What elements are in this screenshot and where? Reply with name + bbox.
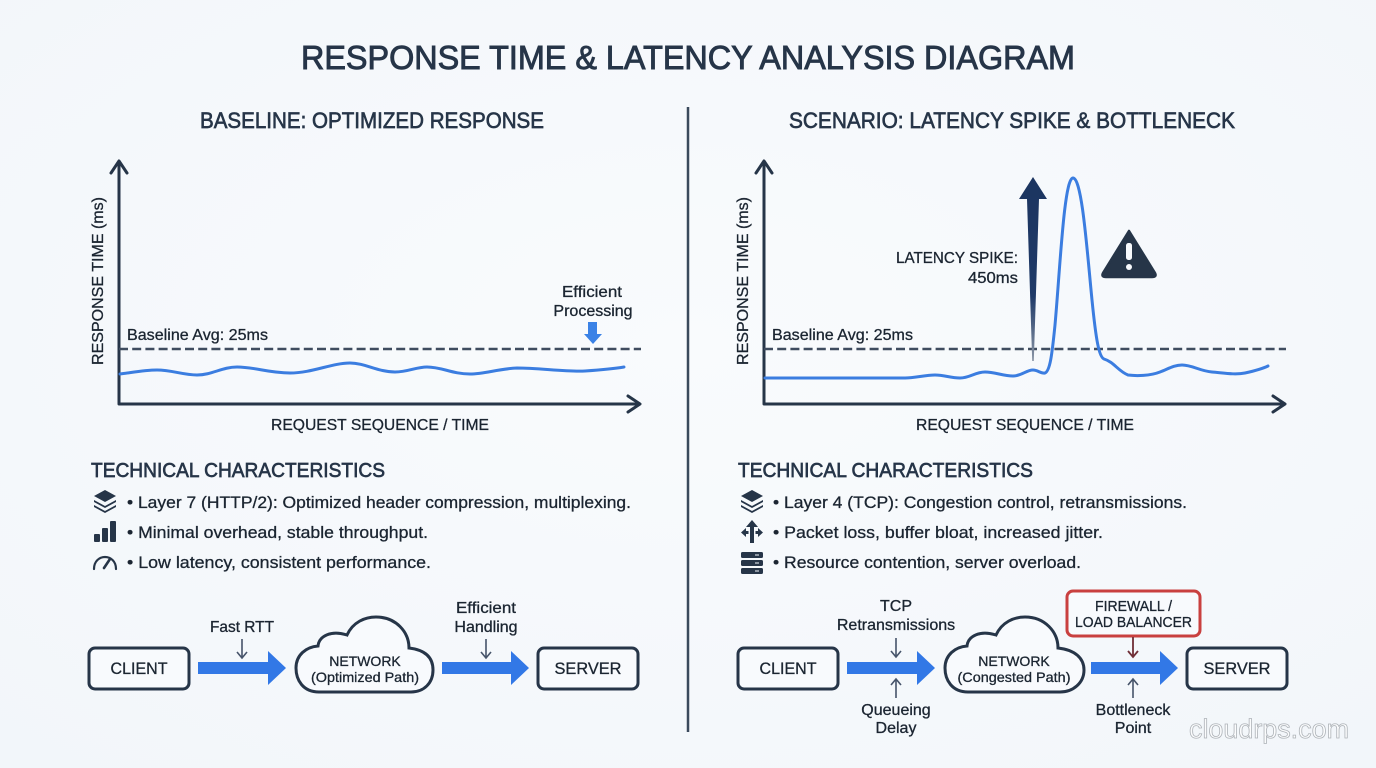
bullet: layer 4: • Layer 4 (TCP): Congestion control, retransmissions. xyxy=(773,493,1187,512)
flow diagram: scenario xyxy=(738,591,1287,737)
small arrow: tcp retransmissions xyxy=(891,638,901,657)
response curve with spike xyxy=(765,178,1268,378)
bullet: layer 7: • Layer 7 (HTTP/2): Optimized header compression, multiplexing. xyxy=(127,493,631,512)
network cloud: NETWORK xyxy=(978,653,1050,669)
efficient processing label: Efficient xyxy=(562,284,623,301)
network cloud: (Congested Path) xyxy=(958,669,1070,685)
heading: baseline: BASELINE: OPTIMIZED RESPONSE xyxy=(200,108,544,133)
latency spike label: 450ms xyxy=(968,270,1018,287)
network cloud: (Optimized Path) xyxy=(311,669,419,685)
arrow: network to server xyxy=(442,651,529,685)
watermark: cloudrps.com xyxy=(1189,714,1349,744)
subheading: TECHNICAL CHARACTERISTICS xyxy=(91,460,385,482)
icon: server stack xyxy=(741,552,763,574)
efficient handling label: Efficient xyxy=(456,600,517,617)
title: RESPONSE TIME & LATENCY ANALYSIS DIAGRAM xyxy=(301,39,1075,76)
bullet: resource contention: • Resource contention, server overload. xyxy=(773,553,1081,572)
bullet: minimal overhead: • Minimal overhead, stable throughput. xyxy=(127,523,428,542)
chart: baseline response time xyxy=(90,161,641,434)
server box xyxy=(538,648,638,689)
bullet: packet loss: • Packet loss, buffer bloat, increased jitter. xyxy=(773,523,1103,542)
efficient processing label: Processing xyxy=(553,303,633,320)
icon: directional arrows xyxy=(741,520,763,543)
flow diagram: baseline xyxy=(89,600,638,692)
x axis label: REQUEST SEQUENCE / TIME xyxy=(271,417,489,434)
icon: signal bars xyxy=(94,521,116,542)
chart axes xyxy=(756,161,1285,412)
baseline average label: Baseline Avg: 25ms xyxy=(127,327,268,344)
client box xyxy=(738,648,838,689)
server box: SERVER xyxy=(554,660,622,678)
y axis label: RESPONSE TIME (ms) xyxy=(90,197,107,365)
firewall load balancer box: LOAD BALANCER xyxy=(1075,615,1192,631)
heading: scenario: SCENARIO: LATENCY SPIKE & BOTTLENECK xyxy=(789,108,1235,133)
baseline average label: Baseline Avg: 25ms xyxy=(772,327,913,344)
client box: CLIENT xyxy=(760,660,816,678)
divider between panels xyxy=(687,107,689,732)
y axis label: RESPONSE TIME (ms) xyxy=(735,197,752,365)
technical characteristics: baseline xyxy=(91,460,631,572)
small arrow: fast rtt xyxy=(237,639,247,658)
latency spike label xyxy=(896,250,1018,287)
panel: baseline optimized response xyxy=(89,108,641,692)
latency spike label: LATENCY SPIKE: xyxy=(896,250,1018,267)
bottleneck point label: Point xyxy=(1115,720,1152,737)
queueing delay label: Delay xyxy=(876,720,916,737)
fast rtt label: Fast RTT xyxy=(210,619,274,636)
baseline dashed line xyxy=(764,348,1286,350)
bullet: low latency: • Low latency, consistent performance. xyxy=(127,553,431,572)
icon: blue down arrow xyxy=(584,322,602,344)
firewall load balancer box xyxy=(1067,591,1200,636)
tcp retransmissions label: Retransmissions xyxy=(837,617,955,634)
response curve xyxy=(120,363,624,375)
network cloud xyxy=(945,617,1084,692)
small arrow: queueing delay xyxy=(891,679,901,698)
baseline dashed line xyxy=(119,348,641,350)
icon: warning triangle xyxy=(1102,231,1156,277)
technical characteristics: scenario xyxy=(738,460,1187,574)
x axis label: REQUEST SEQUENCE / TIME xyxy=(916,417,1134,434)
arrow: client to network xyxy=(198,651,286,685)
efficient handling label: Handling xyxy=(454,619,518,636)
icon: layers xyxy=(94,490,116,513)
small arrow: efficient handling xyxy=(481,639,491,658)
icon: layers xyxy=(741,490,763,513)
firewall load balancer box: FIREWALL / xyxy=(1095,599,1173,615)
tcp retransmissions label: TCP xyxy=(880,598,912,615)
client box: CLIENT xyxy=(110,660,168,678)
network cloud: NETWORK xyxy=(329,653,401,669)
panel: scenario latency spike and bottleneck xyxy=(735,108,1287,737)
chart axes xyxy=(111,161,640,412)
bottleneck point label: Bottleneck xyxy=(1096,702,1171,719)
server box: SERVER xyxy=(1204,660,1271,678)
chart: latency spike xyxy=(735,161,1286,434)
icon: gauge xyxy=(94,557,116,569)
small arrow: bottleneck xyxy=(1128,679,1138,698)
network cloud xyxy=(296,617,433,692)
subheading: TECHNICAL CHARACTERISTICS xyxy=(738,460,1033,482)
small arrow: firewall xyxy=(1128,637,1138,657)
icon: spike arrow xyxy=(1019,177,1047,361)
server box xyxy=(1187,648,1287,689)
queueing delay label: Queueing xyxy=(861,702,931,719)
arrow: network to server xyxy=(1091,651,1178,685)
arrow: client to network xyxy=(847,651,935,685)
client box xyxy=(89,648,189,689)
